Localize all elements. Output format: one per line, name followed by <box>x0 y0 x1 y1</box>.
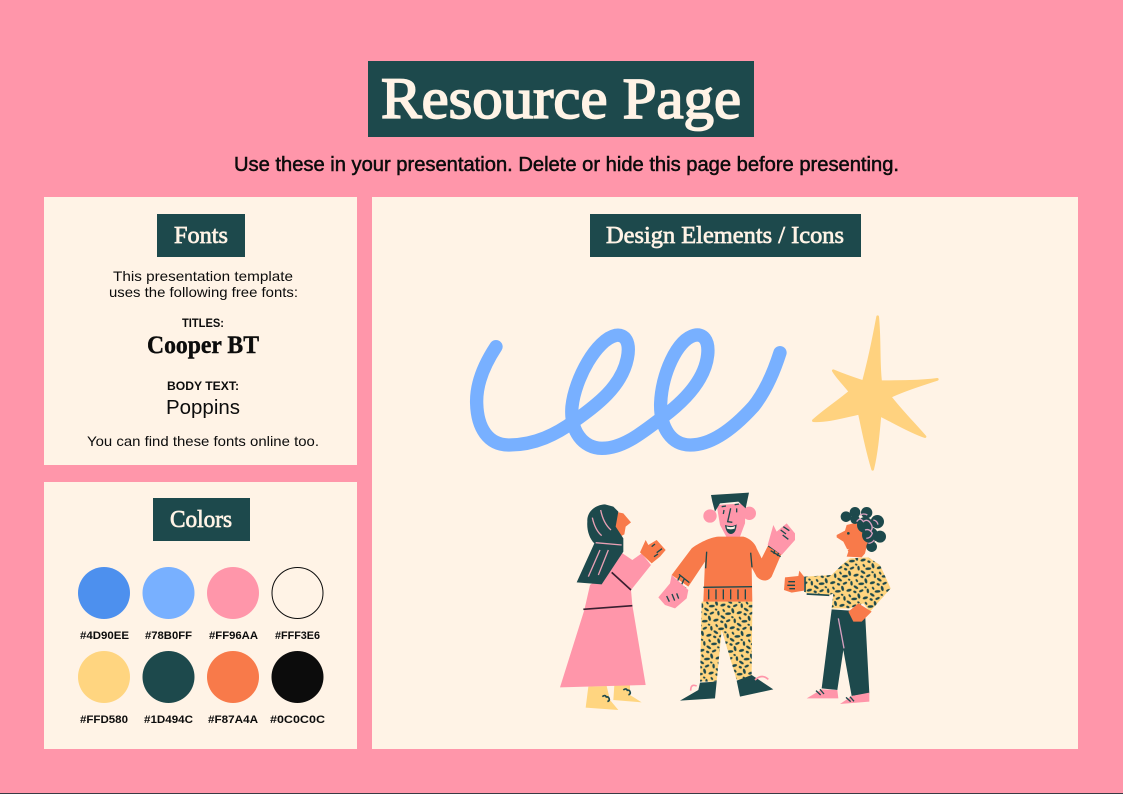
heading: fonts: Fonts <box>174 223 228 249</box>
icon: blue squiggle <box>477 335 780 448</box>
person: man in orange jumper <box>658 493 795 701</box>
body text font: Poppins <box>166 397 240 419</box>
swatch FFD580: #FFD580 <box>80 714 128 726</box>
person: man with curly hair <box>784 507 891 704</box>
panel: fonts <box>44 197 357 465</box>
heading: design elements <box>590 214 861 257</box>
titles font: TITLES: <box>182 316 224 330</box>
panel: design elements <box>372 197 1078 749</box>
subtitle: Use these in your presentation. Delete or hide this page before presenting. <box>234 154 899 176</box>
body text font <box>166 379 240 419</box>
fonts intro text: uses the following free fonts: <box>109 284 298 300</box>
panel: colors <box>44 482 357 749</box>
swatch 1D494C <box>142 651 194 726</box>
swatch 4D90EE <box>78 567 130 642</box>
title: Resource Page <box>381 66 741 131</box>
fonts intro text <box>109 268 298 300</box>
swatch FFF3E6: #FFF3E6 <box>275 630 320 642</box>
titles font <box>147 316 259 359</box>
swatch 0C0C0C <box>270 651 325 726</box>
titles font: Cooper BT <box>147 332 259 359</box>
fonts footer note: You can find these fonts online too. <box>87 433 319 449</box>
swatch 4D90EE: #4D90EE <box>80 630 129 642</box>
swatch F87A4A <box>207 651 259 726</box>
person: woman in hijab <box>560 504 666 710</box>
illustration: three people talking <box>560 493 891 710</box>
swatch FFD580 <box>78 651 130 726</box>
heading: colors: Colors <box>170 507 232 533</box>
swatch 78B0FF <box>142 567 194 642</box>
swatch 1D494C: #1D494C <box>144 714 193 726</box>
swatch F87A4A: #F87A4A <box>208 714 258 726</box>
swatch 78B0FF: #78B0FF <box>145 630 192 642</box>
heading: design elements: Design Elements / Icons <box>606 223 844 249</box>
body text font: BODY TEXT: <box>167 379 239 393</box>
fonts intro text: This presentation template <box>113 268 293 284</box>
icon: yellow star <box>813 317 937 469</box>
swatch 0C0C0C: #0C0C0C <box>270 714 325 726</box>
swatch FFF3E6 <box>272 568 323 642</box>
heading: fonts <box>157 214 245 257</box>
heading: colors <box>153 498 250 541</box>
swatch FF96AA <box>207 567 259 642</box>
swatch FF96AA: #FF96AA <box>209 630 258 642</box>
